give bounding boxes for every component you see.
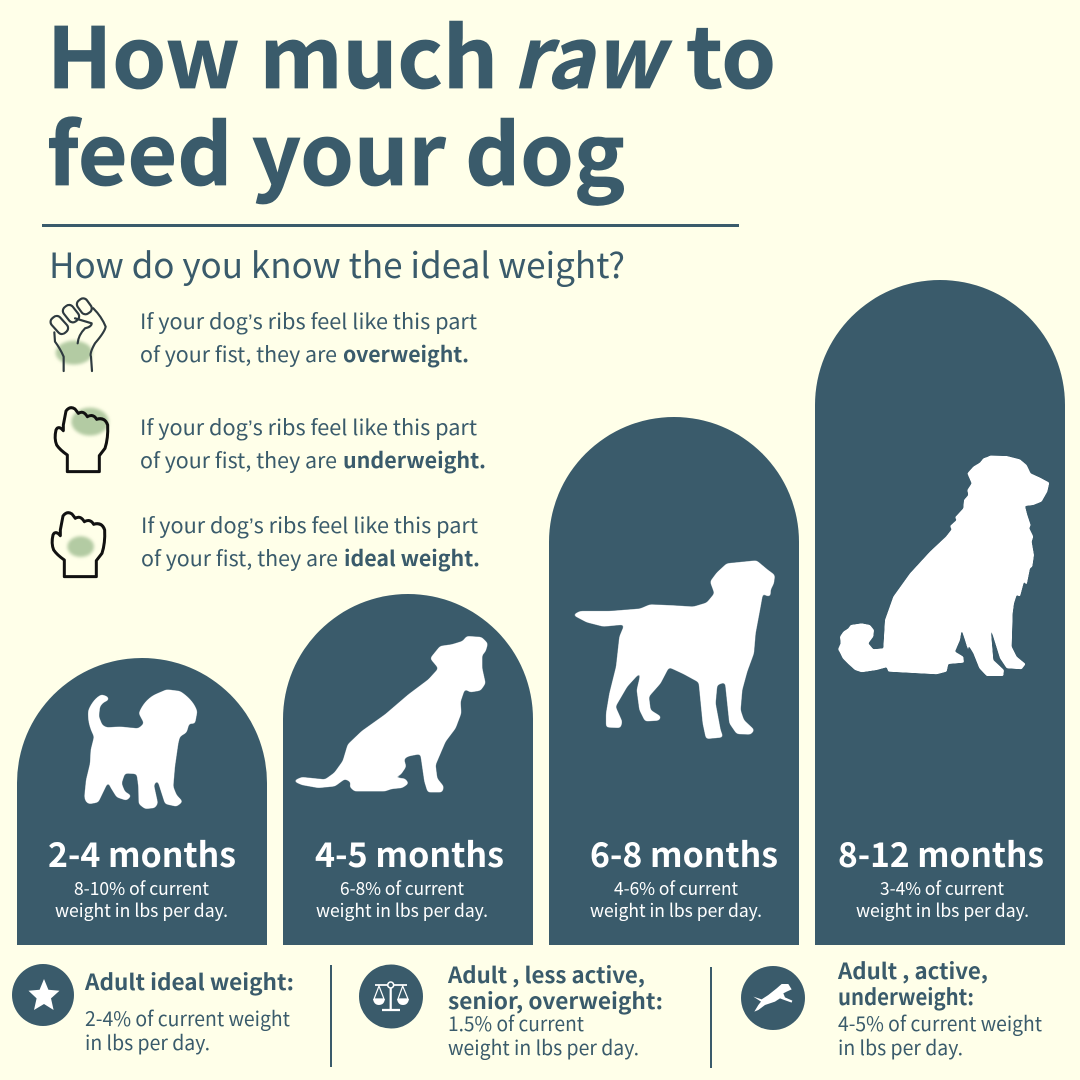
text: ideal weight: If your dog’s ribs feel like this part xyxy=(141,510,478,540)
text block: adult ideal weight: 2-4% of current weight xyxy=(85,1003,290,1032)
text block: adult active: Adult , active, xyxy=(837,954,988,986)
text: 3-4% xyxy=(856,875,1029,923)
text: 6-8% xyxy=(316,875,488,923)
text: 6-8%: 6-8% of current xyxy=(340,875,464,901)
text: underweight xyxy=(140,412,486,475)
text: 8-10%: 8-10% of current xyxy=(74,875,209,901)
text: 8-10% xyxy=(55,875,228,923)
text: 8-10%: weight in lbs per day. xyxy=(55,897,228,923)
icon: standing dog silhouette xyxy=(573,560,775,739)
text: overweight: of your fist, they are xyxy=(140,339,337,369)
icon: fist underweight xyxy=(55,408,109,472)
text: 4-6% xyxy=(590,875,762,923)
panel: 6-8 months xyxy=(549,417,799,945)
text: 3-4%: weight in lbs per day. xyxy=(856,897,1029,923)
text block: adult ideal weight xyxy=(84,965,294,1056)
title: feed your dog xyxy=(47,89,625,210)
text: 3-4%: 3-4% of current xyxy=(880,875,1004,901)
text: ideal weight: ideal weight. xyxy=(344,543,480,573)
icon: sitting dog silhouette xyxy=(293,636,488,792)
label: 4-5 months: 4-5 months xyxy=(315,828,504,877)
text: 4-6%: weight in lbs per day. xyxy=(590,897,762,923)
text block: adult less active: weight in lbs per day. xyxy=(448,1032,639,1061)
text: 6-8%: weight in lbs per day. xyxy=(316,897,488,923)
icon: fist overweight xyxy=(49,297,106,371)
label: 8-12 months: 8-12 months xyxy=(838,828,1044,877)
icon: star badge xyxy=(12,964,74,1026)
label: 2-4 months: 2-4 months xyxy=(48,828,236,877)
text block: adult active: underweight: xyxy=(838,980,974,1012)
text: 4-6%: 4-6% of current xyxy=(614,875,738,901)
text: overweight xyxy=(140,306,477,369)
text: underweight: of your fist, they are xyxy=(140,445,337,475)
subtitle: How do you know the ideal weight? xyxy=(49,238,625,289)
text block: adult active xyxy=(837,954,1042,1061)
panel: 8-12 months xyxy=(815,280,1065,945)
text: overweight: overweight. xyxy=(343,339,469,369)
text: underweight: If your dog’s ribs feel like this part xyxy=(140,412,477,442)
icon: scales badge xyxy=(359,964,423,1028)
text block: adult less active: Adult , less active, xyxy=(447,958,645,990)
text: ideal weight xyxy=(141,510,480,573)
text: overweight: If your dog’s ribs feel like this part xyxy=(140,306,477,336)
title xyxy=(47,0,776,210)
icon: running dog badge xyxy=(741,966,805,1030)
text block: adult active: 4-5% of current weight xyxy=(838,1008,1042,1037)
icon: fist ideal weight xyxy=(52,513,105,577)
text: underweight: underweight. xyxy=(343,445,486,475)
text block: adult less active: senior, overweight: xyxy=(448,984,663,1016)
icon: puppy silhouette xyxy=(84,689,197,809)
label: 6-8 months: 6-8 months xyxy=(590,828,778,877)
text: ideal weight: of your fist, they are xyxy=(141,543,338,573)
panel: 4-5 months xyxy=(283,594,533,945)
text block: adult ideal weight: in lbs per day. xyxy=(85,1027,210,1056)
text block: adult ideal weight: Adult ideal weight: xyxy=(84,965,294,997)
icon: fluffy dog silhouette xyxy=(838,456,1049,676)
text block: adult less active xyxy=(447,958,663,1061)
panel: 2-4 months xyxy=(17,658,267,945)
text block: adult less active: 1.5% of current xyxy=(448,1008,584,1037)
text block: adult active: in lbs per day. xyxy=(838,1032,963,1061)
